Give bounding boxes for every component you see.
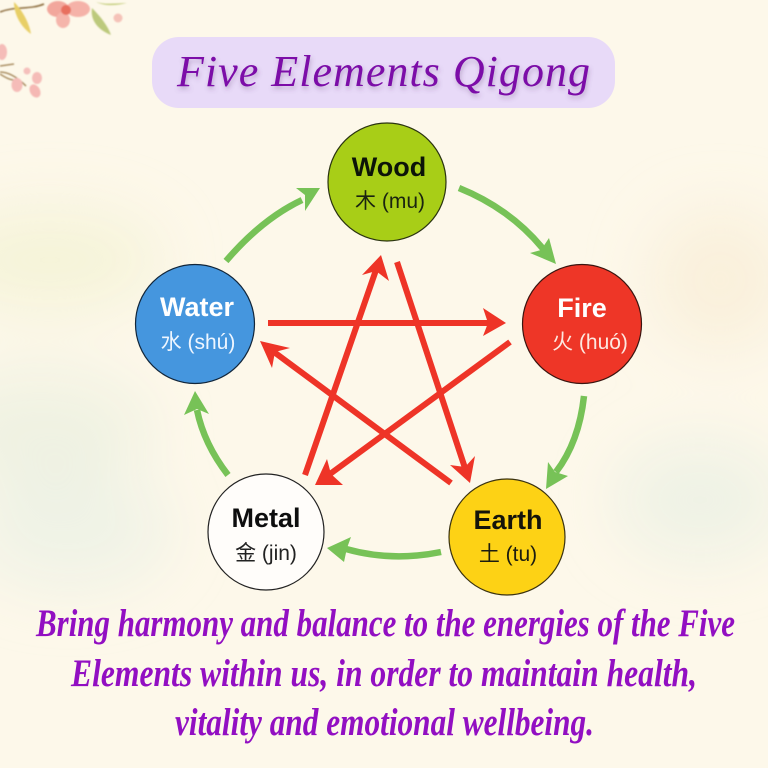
title: Five Elements Qigong <box>176 47 590 96</box>
tagline <box>35 602 735 744</box>
node: Water <box>136 264 254 384</box>
node: Metal: 金 (jin) <box>235 542 297 565</box>
green cycle arrows <box>184 188 584 562</box>
decoration: flowers and leaves <box>0 1 127 100</box>
node: Wood: Wood <box>352 152 426 182</box>
node: Earth <box>449 479 565 595</box>
node: Earth: Earth <box>473 505 543 535</box>
node: Metal: Metal <box>231 503 301 533</box>
node: Wood <box>328 123 446 241</box>
node: Earth: 土 (tu) <box>479 543 537 566</box>
red star arrows <box>260 255 510 485</box>
tagline: vitality and emotional wellbeing. <box>175 701 594 744</box>
title pill <box>152 37 615 108</box>
node: Water: Water <box>160 292 234 322</box>
node: Metal <box>208 474 324 590</box>
node: Water: 水 (shú) <box>161 331 235 354</box>
node: Fire: Fire <box>557 293 607 323</box>
node: Wood: 木 (mu) <box>355 190 425 213</box>
node: Fire: 火 (huó) <box>552 331 628 354</box>
node: Fire <box>522 264 642 384</box>
